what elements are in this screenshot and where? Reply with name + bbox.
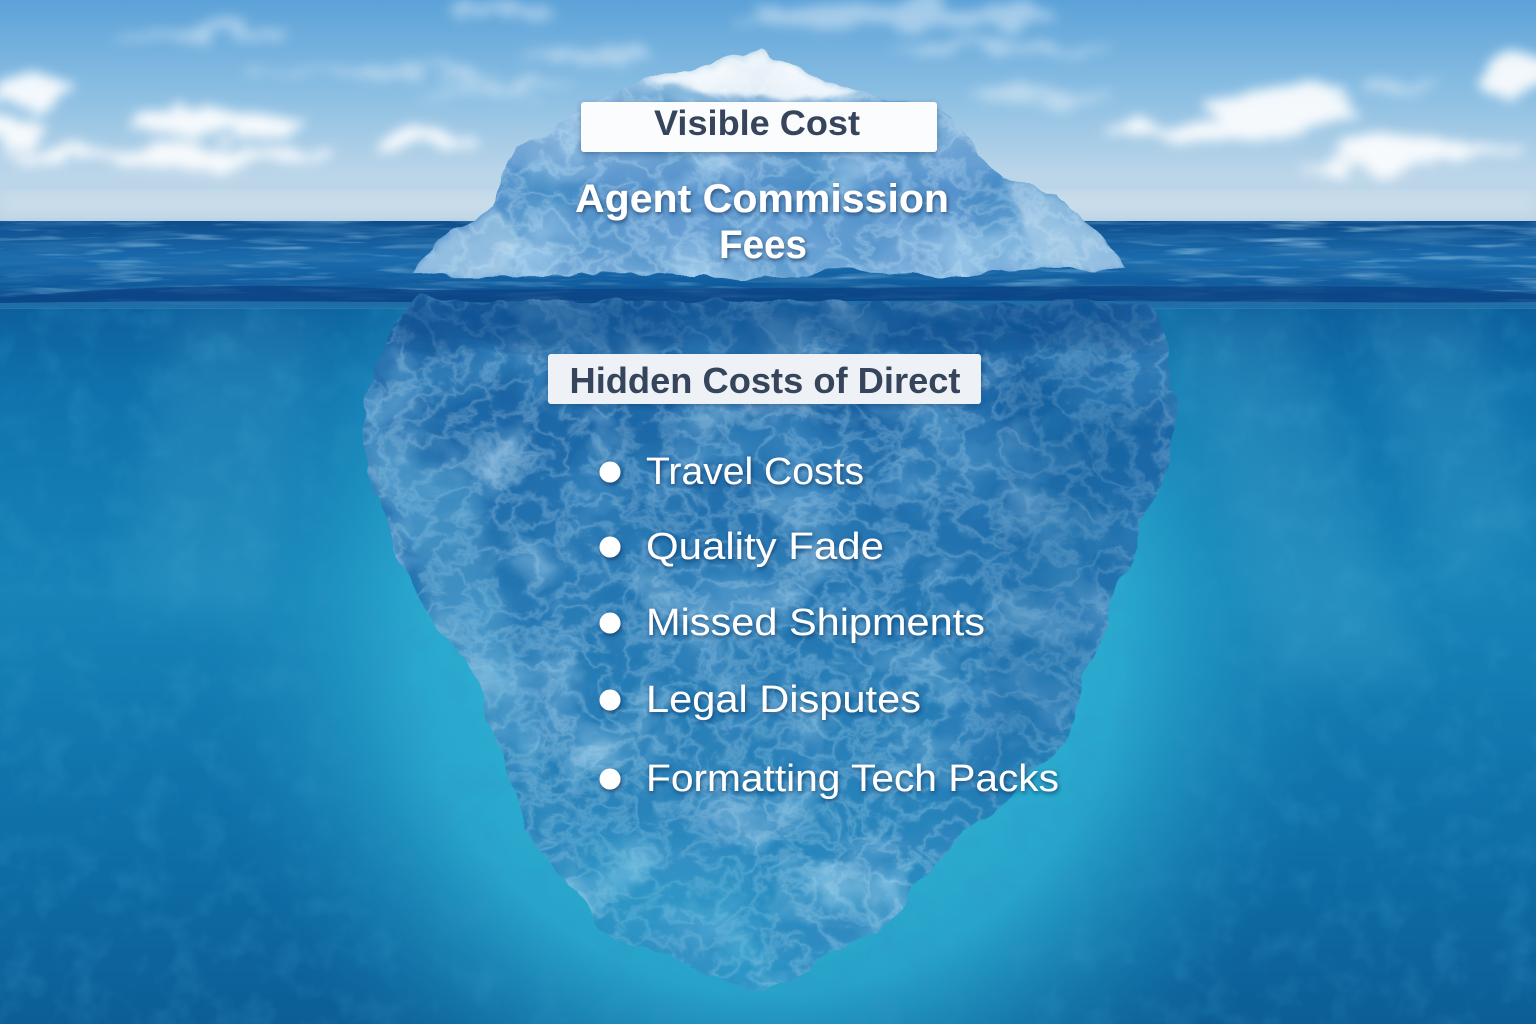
heading: Agent Commission Fees: Fees bbox=[719, 223, 807, 267]
list: hidden costs bbox=[600, 451, 1059, 800]
label: Visible Cost: Visible Cost bbox=[654, 104, 860, 143]
item: Legal Disputes: Legal Disputes bbox=[646, 679, 921, 721]
item: Missed Shipments: Missed Shipments bbox=[646, 602, 985, 644]
background: underwater bbox=[0, 305, 1536, 1024]
iceberg: visible tip bbox=[400, 40, 1145, 285]
waterline waves bbox=[0, 286, 1536, 309]
iceberg: underwater mass bbox=[340, 290, 1200, 1010]
label: Hidden Costs of Direct: Hidden Costs of Direct bbox=[570, 360, 961, 401]
clouds bbox=[0, 2, 1536, 216]
background: ocean surface bbox=[0, 221, 1536, 307]
heading: Agent Commission Fees bbox=[575, 177, 949, 267]
item: Quality Fade: Quality Fade bbox=[646, 526, 884, 568]
label: Visible Cost bbox=[581, 102, 937, 152]
item: Travel Costs: Travel Costs bbox=[646, 451, 864, 493]
heading: Agent Commission Fees: Agent Commission bbox=[575, 177, 949, 221]
background: sky bbox=[0, 0, 1536, 222]
item: Formatting Tech Packs: Formatting Tech Packs bbox=[646, 758, 1059, 800]
